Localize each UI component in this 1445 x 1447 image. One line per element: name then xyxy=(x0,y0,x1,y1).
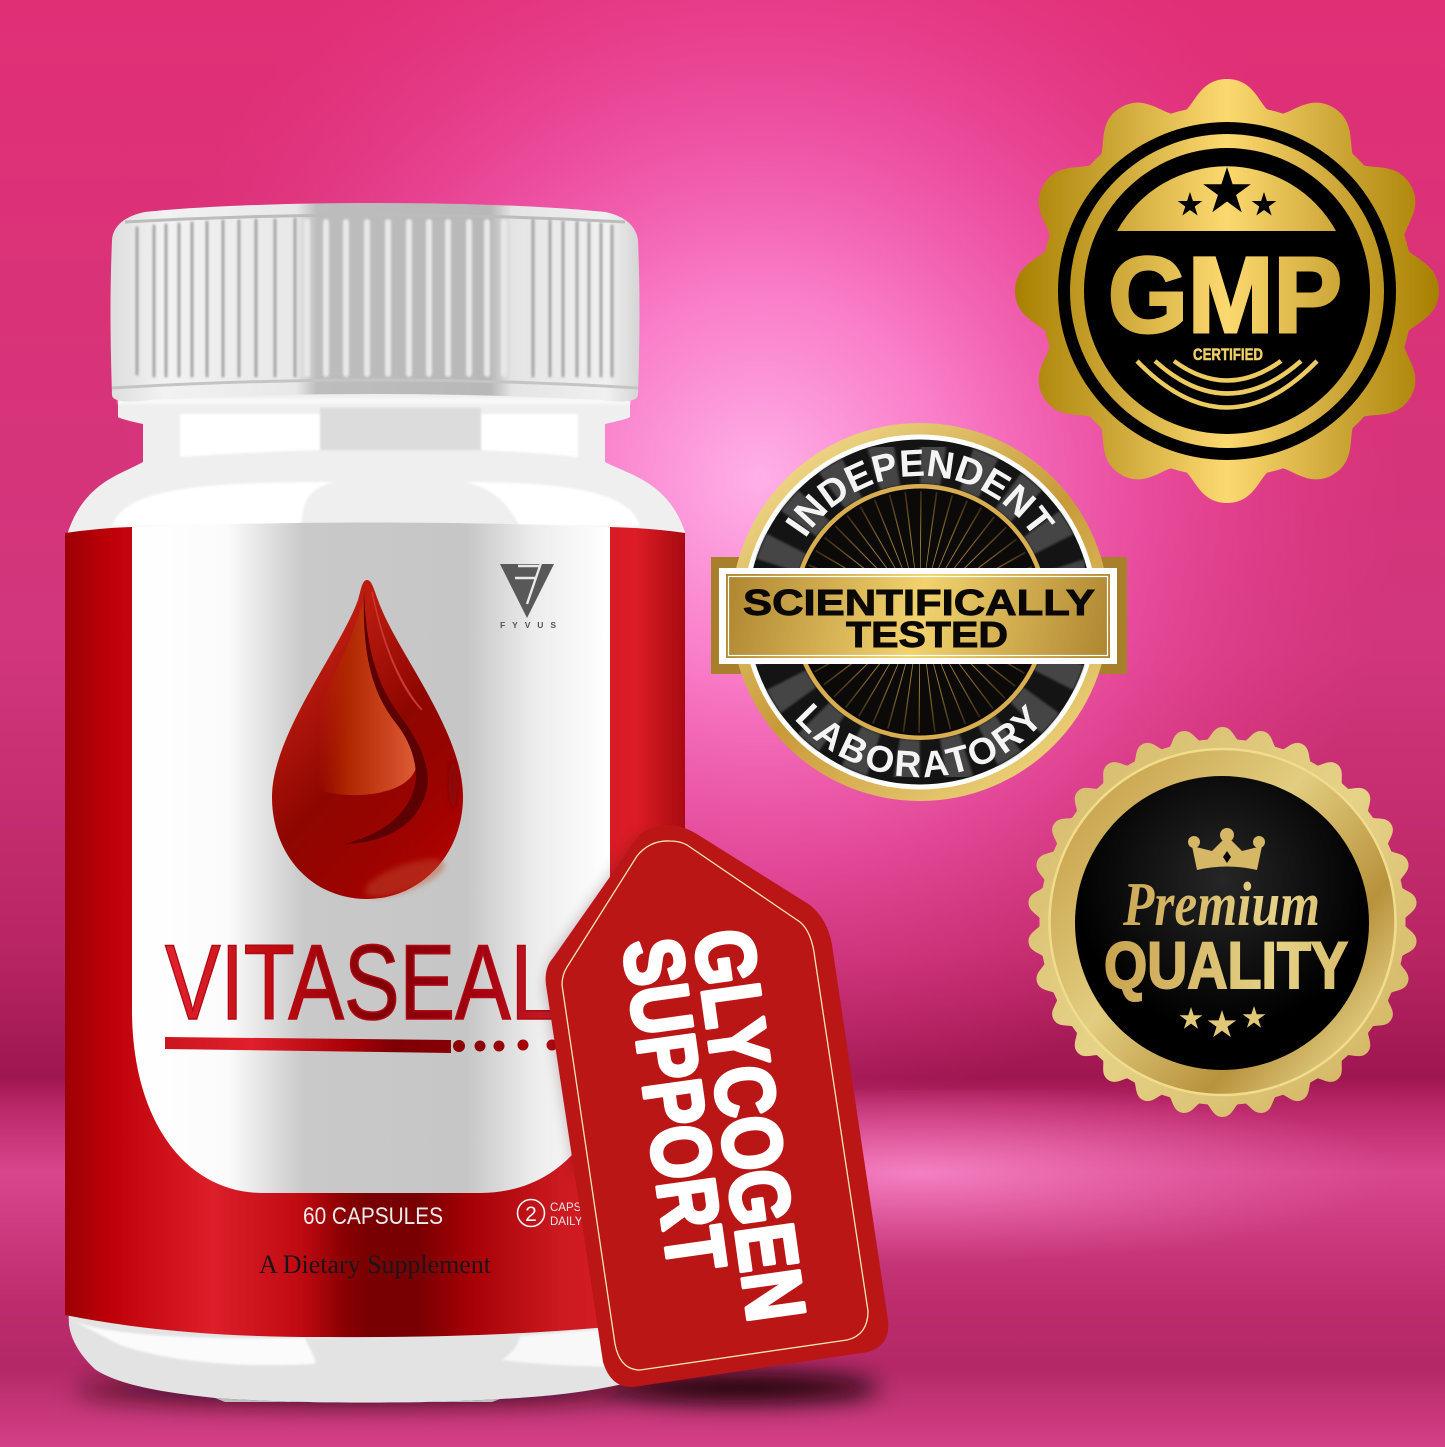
tag text: GLYCOGEN xyxy=(676,924,823,1327)
seal rings xyxy=(1058,122,1396,460)
cap centre ribs xyxy=(307,222,504,374)
dietary supplement line: A Dietary Supplement xyxy=(259,1250,492,1279)
certified lettering: CERTIFIED xyxy=(1193,345,1263,364)
seal rim xyxy=(731,423,1109,801)
curved lines xyxy=(1137,361,1317,408)
ribbon text xyxy=(743,582,1095,655)
daily dose mark: DAILY xyxy=(550,1216,583,1228)
GMP lettering: GMP xyxy=(1108,234,1342,355)
bottle neck and shoulder xyxy=(68,392,685,560)
laboratory arc text: LABORATORY xyxy=(796,702,1038,778)
name underline with dots xyxy=(165,1037,558,1053)
back ribbon xyxy=(711,557,1127,674)
brand logo: FYVUS: FYVUS xyxy=(500,620,556,630)
ground shadow under bottle xyxy=(75,1374,880,1404)
front ribbon xyxy=(719,568,1117,664)
product name: VITASEAL xyxy=(165,922,557,1042)
crown icon xyxy=(1188,828,1265,870)
tag soft shadow xyxy=(546,834,660,1170)
scalloped gold edge xyxy=(1020,720,1425,1125)
badge: GMP certified xyxy=(1010,75,1444,509)
badge: premium quality xyxy=(1020,720,1425,1125)
daily dose mark: CAPSULES xyxy=(550,1202,612,1214)
dome with stars xyxy=(1117,166,1336,231)
brand logo: FYVUS xyxy=(500,563,556,630)
ribbon text: TESTED xyxy=(846,614,1008,655)
daily dose mark: 2 xyxy=(525,1203,537,1226)
gold scalloped seal xyxy=(1010,75,1444,509)
blood drop logo xyxy=(272,580,463,905)
ribbon text: SCIENTIFICALLY xyxy=(743,582,1095,623)
red label wrap xyxy=(65,527,685,1337)
tag stitched outline xyxy=(562,841,868,1370)
independent arc text: INDEPENDENT xyxy=(785,450,1056,537)
daily dose mark xyxy=(518,1200,612,1228)
product tag xyxy=(546,825,888,1387)
tag text xyxy=(605,924,823,1327)
cap ribs xyxy=(137,219,612,376)
capsule count: 60 CAPSULES xyxy=(303,1203,443,1230)
badge: scientifically tested xyxy=(711,423,1127,801)
bottle base xyxy=(68,1300,640,1403)
sunburst rays xyxy=(840,532,1000,692)
tag text: SUPPORT xyxy=(605,933,744,1276)
supplement bottle xyxy=(65,203,685,1403)
gold ring xyxy=(1050,749,1396,1095)
quality lettering: QUALITY xyxy=(1104,928,1348,1002)
bottle cap xyxy=(110,203,640,402)
white label panel xyxy=(132,522,610,1193)
three stars xyxy=(1180,1006,1265,1037)
premium script: Premium xyxy=(1122,871,1320,939)
tag shape xyxy=(546,825,888,1387)
